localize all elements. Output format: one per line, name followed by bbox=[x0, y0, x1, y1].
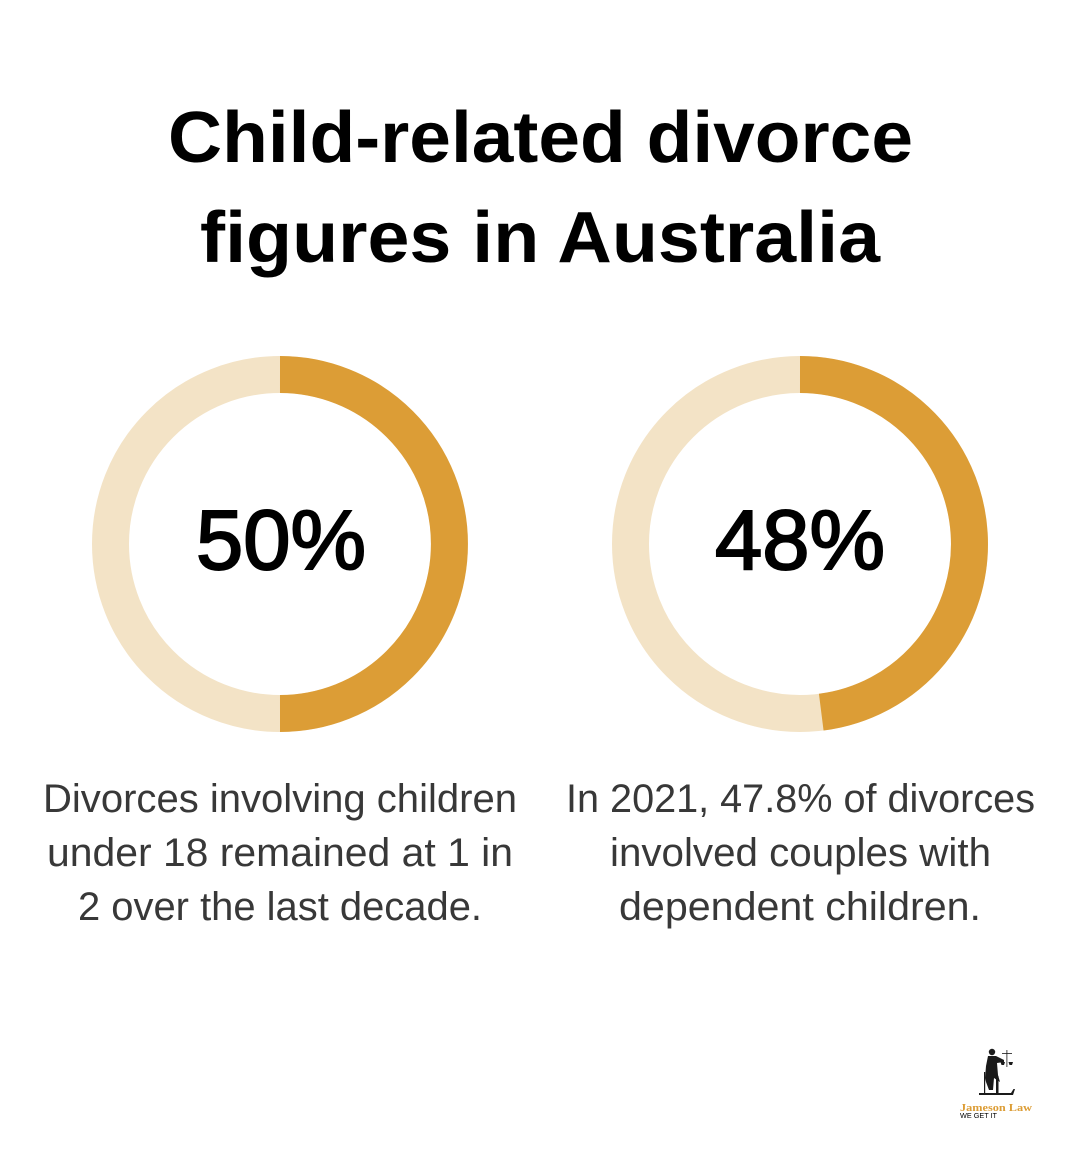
description: 50%: 2 over the last decade. bbox=[78, 885, 482, 929]
panel: 48% statistic bbox=[566, 374, 1035, 929]
description: 48% bbox=[566, 777, 1035, 929]
donut chart: 48% bbox=[630, 374, 970, 714]
title: Child-related divorce bbox=[168, 98, 913, 178]
icon: lady justice with L bbox=[979, 1049, 1015, 1095]
panel: 50% statistic bbox=[43, 374, 517, 929]
description: 48%: dependent children. bbox=[619, 885, 981, 929]
value: 48%: 48% bbox=[715, 493, 885, 587]
description: 50% bbox=[43, 777, 517, 929]
description: 48%: In 2021, 47.8% of divorces bbox=[566, 777, 1035, 821]
logo tagline: WE GET IT bbox=[960, 1113, 998, 1120]
value: 50%: 50% bbox=[196, 493, 366, 587]
description: 50%: under 18 remained at 1 in bbox=[47, 831, 513, 875]
logo: Jameson Law bbox=[960, 1049, 1032, 1120]
description: 50%: Divorces involving children bbox=[43, 777, 517, 821]
logo name: Jameson Law bbox=[960, 1102, 1032, 1114]
donut chart: 50% bbox=[110, 374, 450, 714]
title bbox=[168, 98, 913, 278]
title: figures in Australia bbox=[200, 198, 881, 278]
description: 48%: involved couples with bbox=[610, 831, 991, 875]
